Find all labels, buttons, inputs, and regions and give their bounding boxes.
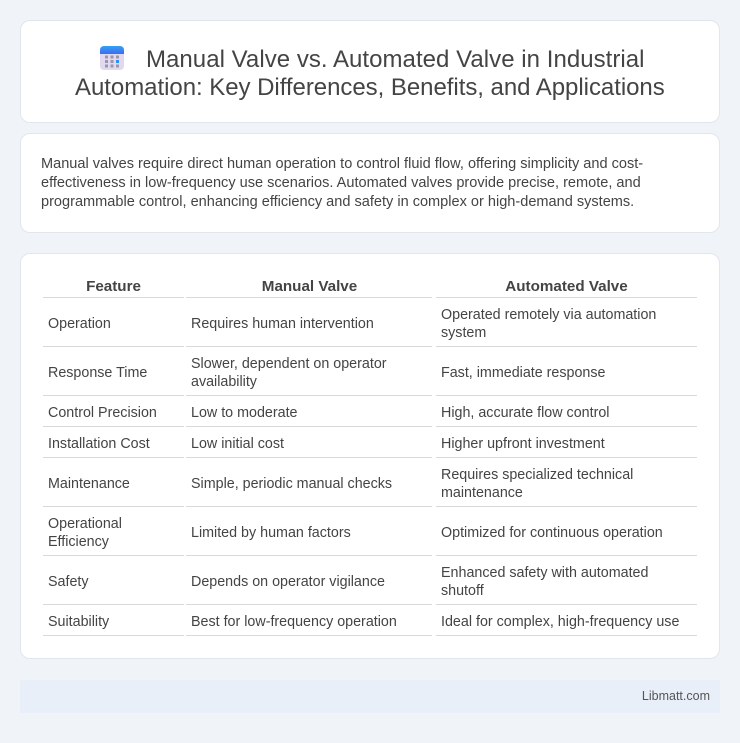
- table: comparison: Enhanced safety with automated: [441, 565, 648, 581]
- row: operational efficiency: [48, 516, 122, 550]
- text: intro paragraph: [41, 156, 643, 210]
- footer bar: [20, 680, 720, 713]
- table: comparison: High, accurate flow control: [441, 405, 609, 421]
- table: comparison: shutoff: [441, 583, 484, 599]
- table header: manual valve: Manual Valve: [262, 278, 357, 295]
- table: comparison: Best for low-frequency operation: [191, 614, 397, 630]
- panel: comparison table card: [20, 253, 720, 659]
- table: comparison: Requires human intervention: [191, 316, 374, 332]
- table header: automated valve: Automated Valve: [505, 278, 628, 295]
- icon: calendar grid: [100, 46, 124, 70]
- panel: title card: [20, 20, 720, 123]
- row: operational efficiency: Operational: [48, 516, 122, 532]
- row: control precision: Control Precision: [48, 405, 157, 421]
- table header: feature: Feature: [86, 278, 141, 295]
- panel: intro card: [20, 133, 720, 233]
- heading: title line 2: Automation: Key Differences, Benefits, and Applications: [75, 74, 665, 101]
- row: operational efficiency: Efficiency: [48, 534, 109, 550]
- table: comparison: Fast, immediate response: [441, 365, 605, 381]
- table: comparison: Optimized for continuous operation: [441, 525, 663, 541]
- table: comparison: Simple, periodic manual checks: [191, 476, 392, 492]
- table: comparison: maintenance: [441, 485, 523, 501]
- table: comparison: Ideal for complex, high-frequency use: [441, 614, 679, 630]
- row: installation cost: Installation Cost: [48, 436, 150, 452]
- text: intro paragraph: Manual valves require direct human operation to control fluid flow, offering simplicity and cost-: [41, 156, 643, 172]
- row: response time: Response Time: [48, 365, 147, 381]
- table: comparison: Operated remotely via automation: [441, 307, 656, 323]
- table: comparison: Depends on operator vigilance: [191, 574, 385, 590]
- table: comparison: Slower, dependent on operator: [191, 356, 387, 372]
- row: maintenance: Maintenance: [48, 476, 130, 492]
- footer: source: Libmatt.com: [642, 689, 710, 703]
- row: operation: Operation: [48, 316, 111, 332]
- table: comparison: Requires specialized technical: [441, 467, 633, 483]
- table: comparison: availability: [191, 374, 257, 390]
- row: safety: Safety: [48, 574, 89, 590]
- table: comparison: Higher upfront investment: [441, 436, 605, 452]
- table: comparison: system: [441, 325, 486, 341]
- text: intro paragraph: programmable control, enhancing efficiency and safety in complex or high-demand systems.: [41, 194, 634, 210]
- heading: title line 1: Manual Valve vs. Automated Valve in Industrial: [146, 46, 645, 73]
- row: suitability: Suitability: [48, 614, 109, 630]
- table: comparison: Limited by human factors: [191, 525, 351, 541]
- text: intro paragraph: effectiveness in low-frequency use scenarios. Automated valves provide precise, remote, and: [41, 175, 641, 191]
- table: comparison: Low initial cost: [191, 436, 284, 452]
- table: comparison: Low to moderate: [191, 405, 298, 421]
